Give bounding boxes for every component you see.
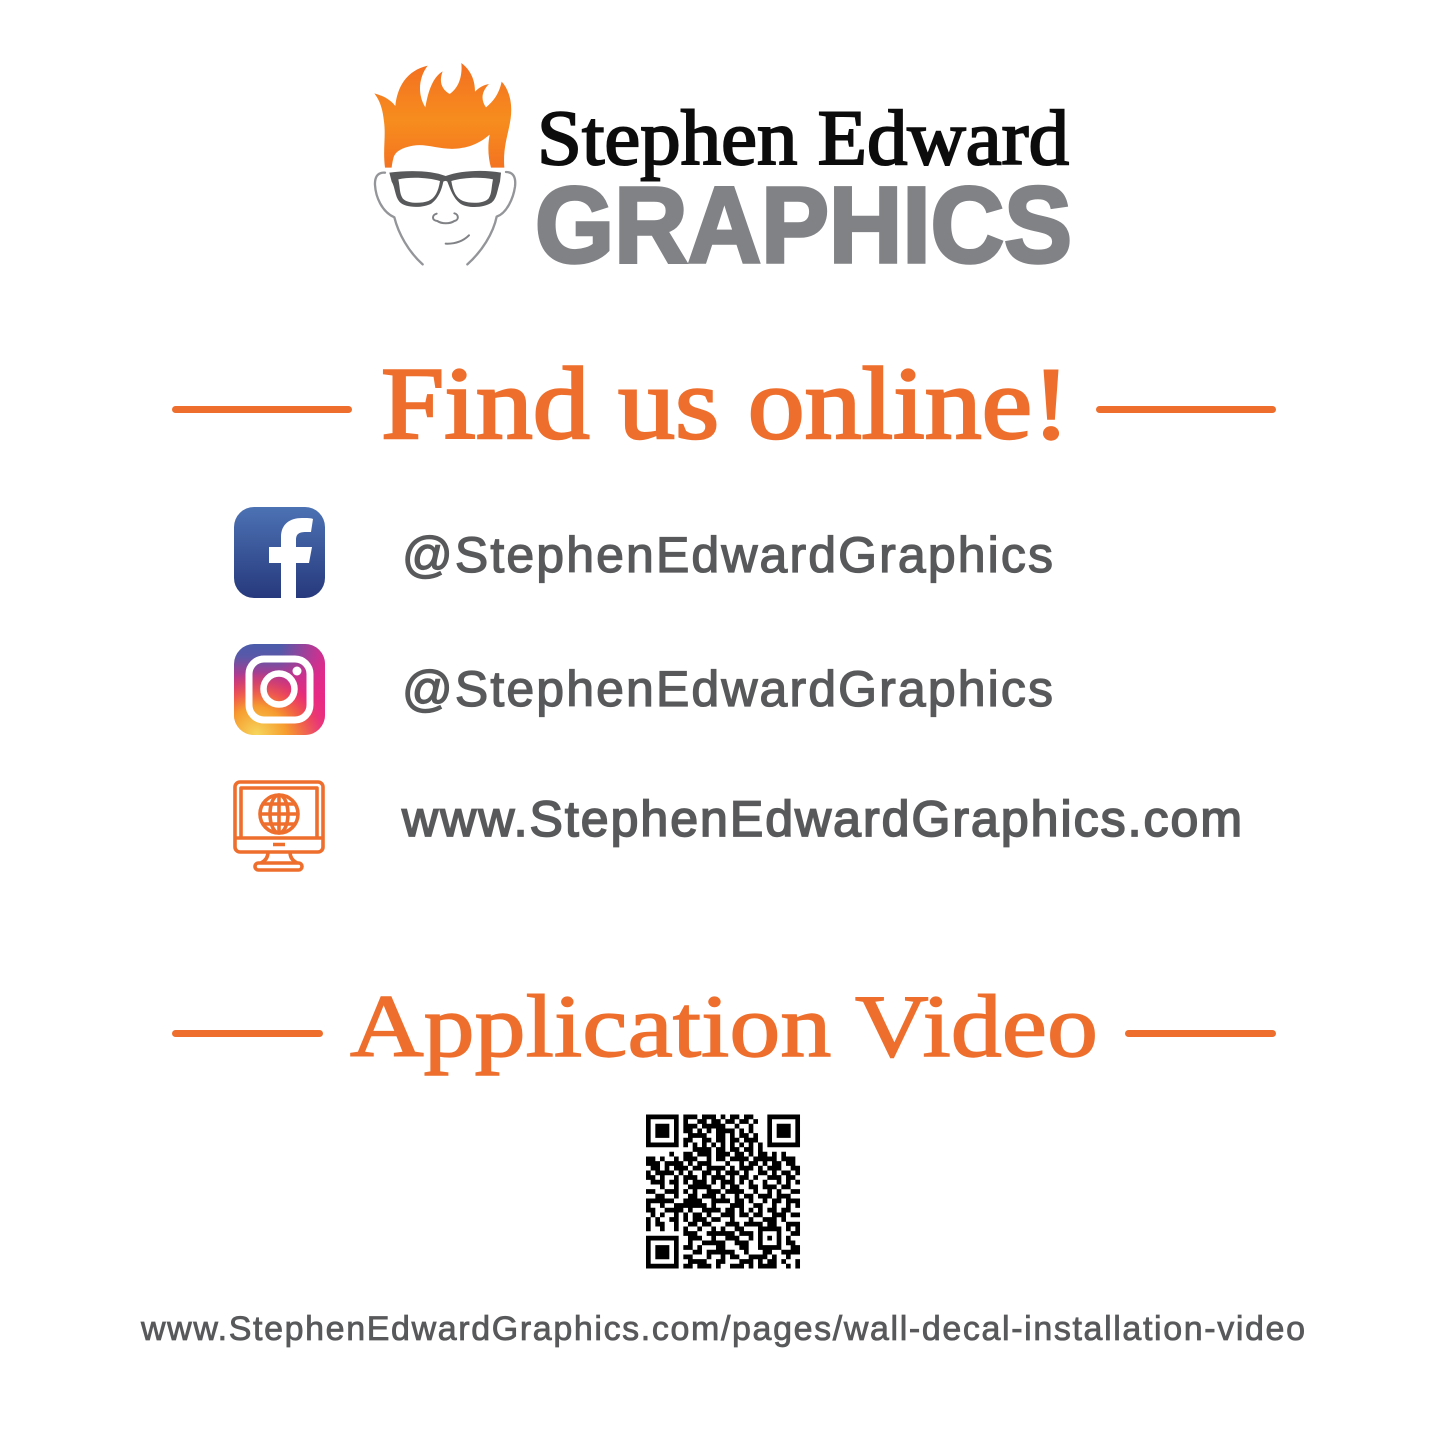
icon: flame hair: [374, 63, 511, 168]
icon: Facebook: [234, 507, 325, 598]
icon: nose and smile: [433, 213, 469, 244]
text: Facebook handle: @StephenEdwardGraphics: [402, 527, 1053, 583]
text: Instagram handle: @StephenEdwardGraphics: [402, 661, 1053, 717]
row: Facebook: [234, 507, 1053, 598]
wordmark: Stephen Edward: Stephen Edward: [537, 94, 1069, 181]
heading: Application Video: [172, 978, 1276, 1076]
heading: Find us online!: [172, 347, 1276, 461]
heading: Find us online!: Find us online!: [381, 347, 1070, 461]
icon: face outline: [375, 172, 515, 264]
logo: Stephen Edward Graphics: [374, 63, 1072, 285]
wordmark: GRAPHICS: GRAPHICS: [535, 164, 1072, 285]
row: Instagram: [234, 644, 1053, 735]
row: website: [235, 782, 1242, 870]
QR code: [646, 1117, 800, 1266]
icon: glasses: [389, 171, 501, 207]
heading: Application Video: Application Video: [350, 978, 1098, 1076]
icon: Instagram: [234, 644, 325, 735]
text: website URL: www.StephenEdwardGraphics.com: [401, 791, 1242, 847]
icon: desktop monitor with globe: [235, 782, 323, 870]
logo icon: cartoon head with orange hair and glasses: [374, 63, 515, 264]
text: video URL: www.StephenEdwardGraphics.com/pages/wall-decal-installation-video: [140, 1310, 1305, 1348]
